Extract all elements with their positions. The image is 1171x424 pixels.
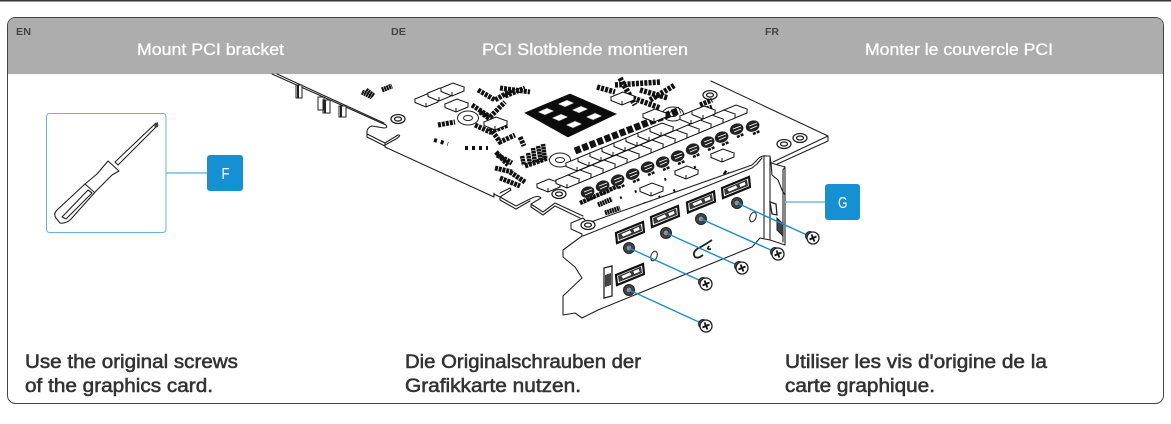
mounting holes [391, 90, 807, 198]
screws with blue guide lines [629, 203, 819, 332]
instruction DE [405, 352, 642, 397]
instruction EN: Use the original screws [25, 352, 238, 373]
top rule [0, 0, 1171, 2]
callout F with screwdriver: F [222, 166, 230, 183]
icon: screwdriver [55, 122, 158, 223]
header band [8, 18, 1163, 74]
callout G [785, 184, 860, 220]
tool box [46, 114, 166, 232]
PCI bracket [563, 156, 785, 318]
language code DE: DE [391, 27, 406, 38]
small component clusters [362, 78, 737, 223]
bracket mounting hole on tab [581, 220, 595, 230]
instruction FR [785, 352, 1047, 397]
cover notches [770, 202, 777, 215]
language code EN: EN [16, 27, 31, 38]
screw wells [624, 198, 742, 296]
bracket oval holes [649, 250, 659, 262]
callout G: G [838, 195, 848, 212]
language code FR: FR [765, 27, 780, 38]
instruction EN: of the graphics card. [25, 376, 213, 397]
instruction FR: carte graphique. [785, 376, 935, 397]
instruction EN [25, 352, 238, 397]
choke clusters [579, 118, 761, 200]
heading EN: Mount PCI bracket [137, 41, 284, 59]
rear standoffs [296, 85, 346, 117]
instruction DE: Die Originalschrauben der [405, 352, 642, 373]
heading FR: Monter le couvercle PCI [865, 41, 1053, 59]
GPU chip [527, 95, 614, 136]
instruction DE: Grafikkarte nutzen. [405, 376, 581, 397]
callout F with screwdriver [46, 114, 243, 232]
VRM blocks [415, 83, 747, 196]
instruction FR: Utiliser les vis d'origine de la [785, 352, 1047, 373]
DP and HDMI ports [616, 177, 750, 285]
board outline [272, 74, 828, 218]
side vent slot [604, 266, 612, 298]
graphics card board [272, 74, 828, 223]
heading DE: PCI Slotblende montieren [482, 41, 688, 59]
